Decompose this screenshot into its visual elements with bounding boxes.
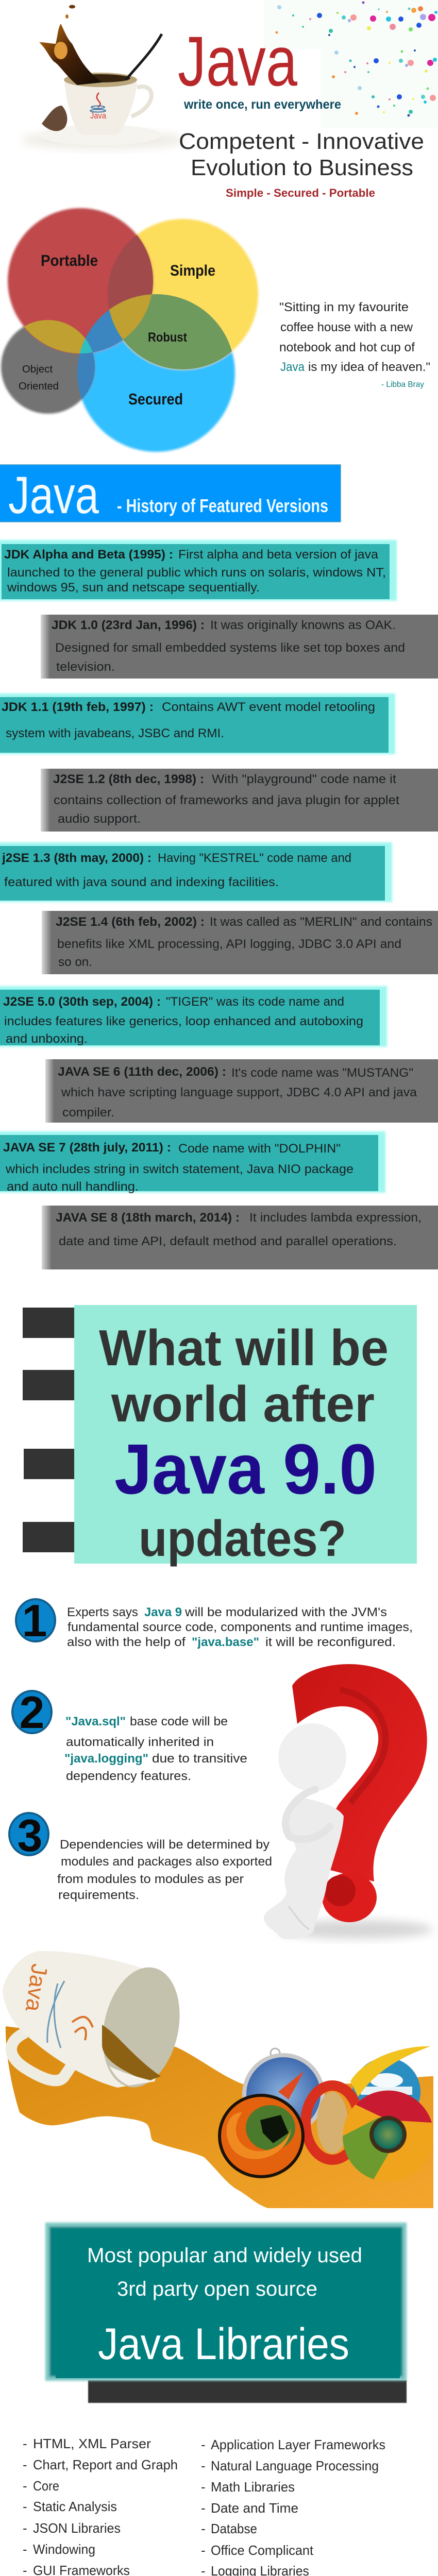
panel: J2SE 1.2: contains collection of frameworks and java plugin for applet bbox=[54, 793, 399, 807]
mug java logo: Java bbox=[21, 1962, 52, 2013]
panel: Java SE 8: date and time API, default method and parallel operations. bbox=[59, 1234, 397, 1248]
panel: JDK Alpha and Beta: First alpha and beta version of java bbox=[178, 548, 379, 562]
icon: number 1: 1 bbox=[22, 1595, 47, 1646]
list: libraries right column: - bbox=[201, 2479, 206, 2495]
subheading: Simple Secured Portable: Simple - Secured - Portable bbox=[226, 187, 375, 199]
icon: coffee cup with splash bbox=[21, 5, 186, 148]
step 1: Java 9 bbox=[144, 1605, 182, 1619]
venn labels: Simple bbox=[170, 262, 215, 279]
step 3: modules and packages also exported bbox=[61, 1855, 272, 1869]
venn labels: Secured bbox=[128, 390, 183, 408]
panel: Java Libraries banner: Java Libraries bbox=[98, 2319, 349, 2369]
list: libraries right column: Natural Language Processing bbox=[211, 2458, 379, 2473]
list: libraries right column: Date and Time bbox=[211, 2500, 298, 2516]
list: libraries left column: HTML, XML Parser bbox=[33, 2436, 151, 2451]
list: libraries right column: - bbox=[201, 2437, 206, 2452]
quote: notebook and hot cup of bbox=[279, 341, 415, 354]
panel: Java SE 8: JAVA SE 8 (18th march, 2014) : bbox=[56, 1211, 240, 1225]
venn labels: Robust bbox=[148, 330, 188, 345]
panel: Java SE 6: which have scripting language support, JDBC 4.0 API and java bbox=[61, 1086, 417, 1099]
panel: Java Libraries banner bbox=[47, 2225, 407, 2403]
list: libraries right column: Math Libraries bbox=[211, 2479, 295, 2495]
icon: safari bbox=[244, 2048, 323, 2133]
list: libraries left column: - bbox=[23, 2436, 27, 2451]
step 2: automatically inherited in bbox=[66, 1735, 214, 1749]
panel: JDK 1.1: system with javabeans, JSBC and RMI. bbox=[6, 726, 224, 740]
step 3 bbox=[9, 1810, 272, 1902]
tagline: write once, run everywhere bbox=[183, 97, 341, 112]
list: libraries right column: Application Layer Frameworks bbox=[211, 2437, 385, 2452]
list: libraries right column bbox=[201, 2437, 385, 2576]
icon: number 2 bbox=[12, 1687, 52, 1738]
step 2: "java.logging" bbox=[64, 1752, 148, 1766]
panel: what will be world after Java 9.0: What will be bbox=[99, 1319, 389, 1376]
panel: JDK 1.0: television. bbox=[56, 660, 115, 674]
icon: number 3: 3 bbox=[18, 1810, 42, 1861]
panel: J2SE 1.4: It was called as "MERLIN" and contains bbox=[210, 915, 432, 929]
panel: JDK 1.1: Contains AWT event model retooling bbox=[162, 700, 375, 714]
step 1: fundamental source code, components and runtime images, bbox=[68, 1620, 413, 1634]
step 1: "java.base" bbox=[192, 1635, 259, 1649]
list: libraries left column: Windowing bbox=[33, 2541, 95, 2557]
list: libraries right column: - bbox=[201, 2458, 206, 2473]
venn labels: Object bbox=[22, 364, 53, 375]
step 2: "Java.sql" bbox=[65, 1715, 126, 1728]
panel: JDK Alpha and Beta: windows 95, sun and netscape sequentially. bbox=[7, 581, 260, 595]
quote: "Sitting in my favourite bbox=[279, 300, 409, 314]
panel: Java SE 7 bbox=[0, 1131, 385, 1194]
coffee spill bbox=[6, 2026, 433, 2208]
panel: Java SE 6 bbox=[45, 1059, 438, 1123]
heading: Competent Innovative: Competent - Innovative bbox=[179, 129, 424, 154]
panel: JDK 1.0: Designed for small embedded systems like set top boxes and bbox=[55, 641, 405, 655]
heading: Competent Innovative: Evolution to Business bbox=[191, 155, 413, 180]
step 1: Experts says bbox=[67, 1605, 138, 1619]
panel: history header: - History of Featured Versions bbox=[117, 495, 328, 516]
panel: J2SE 1.2: audio support. bbox=[58, 812, 141, 826]
panel: Java SE 6: It's code name was "MUSTANG" bbox=[231, 1066, 413, 1080]
mug java logo bbox=[21, 1962, 93, 2048]
panel: Java SE 6: JAVA SE 6 (11th dec, 2006) : bbox=[58, 1065, 226, 1079]
panel: what will be world after Java 9.0 bbox=[23, 1305, 417, 1567]
quote: Java bbox=[280, 360, 305, 374]
list: libraries right column: Office Complicant bbox=[211, 2543, 314, 2558]
icon: opera bbox=[306, 2086, 359, 2160]
list: libraries left column: Static Analysis bbox=[33, 2499, 117, 2514]
panel: what will be world after Java 9.0: world after bbox=[111, 1376, 375, 1432]
panel: J2SE 1.3: Having "KESTREL" code name and bbox=[158, 851, 351, 865]
panel: J2SE 1.4: so on. bbox=[58, 955, 92, 969]
panel: J2SE 1.3: j2SE 1.3 (8th may, 2000) : bbox=[2, 851, 151, 865]
step 2 bbox=[12, 1687, 247, 1783]
panel: JDK Alpha and Beta bbox=[0, 540, 397, 601]
panel: J2SE 1.4: benefits like XML processing, API logging, JDBC 3.0 API and bbox=[57, 937, 401, 951]
panel: Java SE 7: Code name with "DOLPHIN" bbox=[178, 1142, 341, 1156]
panel: what will be world after Java 9.0: Java 9.0 bbox=[114, 1430, 377, 1509]
panel: Java SE 6: compiler. bbox=[62, 1106, 114, 1120]
mug bbox=[3, 1951, 190, 2094]
panel: J2SE 1.2: J2SE 1.2 (8th dec, 1998) : bbox=[53, 772, 204, 786]
step 3: from modules to modules as per bbox=[57, 1872, 244, 1886]
confetti background bbox=[264, 0, 438, 128]
panel: Java SE 7: and auto null handling. bbox=[7, 1180, 139, 1194]
heading: Competent Innovative bbox=[179, 129, 424, 180]
panel: J2SE 1.2 bbox=[41, 769, 438, 832]
icon: spilled Java mug and browsers bbox=[3, 1951, 433, 2208]
step 2: dependency features. bbox=[66, 1769, 191, 1783]
panel: J2SE 5.0: "TIGER" was its code name and bbox=[166, 995, 344, 1009]
list: libraries left column: - bbox=[23, 2520, 27, 2536]
panel: Java SE 8: It includes lambda expression, bbox=[249, 1211, 422, 1225]
icon: number 3 bbox=[9, 1810, 48, 1861]
panel: Java SE 7: JAVA SE 7 (28th july, 2011) : bbox=[3, 1141, 171, 1155]
panel: JDK 1.0 bbox=[41, 615, 438, 679]
list: libraries left column: Core bbox=[33, 2478, 59, 2494]
venn labels: Portable bbox=[41, 251, 98, 269]
list: libraries left column: JSON Libraries bbox=[33, 2520, 121, 2536]
panel: Java Libraries banner: 3rd party open source bbox=[117, 2278, 317, 2300]
list: libraries left column bbox=[23, 2436, 178, 2576]
panel: JDK 1.0: It was originally knowns as OAK. bbox=[210, 618, 396, 632]
step 1: it will be reconfigured. bbox=[265, 1635, 396, 1649]
icon: number 2: 2 bbox=[20, 1687, 44, 1738]
list: libraries left column: - bbox=[23, 2499, 27, 2514]
step 1: also with the help of bbox=[67, 1635, 186, 1649]
step 2: due to transitive bbox=[152, 1752, 247, 1766]
panel: Java Libraries banner: Most popular and widely used bbox=[87, 2244, 362, 2267]
quote: - Libba Bray bbox=[381, 380, 424, 389]
panel: Java SE 8 bbox=[42, 1206, 438, 1269]
panel: J2SE 5.0: J2SE 5.0 (30th sep, 2004) : bbox=[3, 995, 161, 1009]
quote: is my idea of heaven." bbox=[308, 360, 430, 374]
panel: J2SE 1.4 bbox=[42, 911, 438, 974]
icon: firefox bbox=[218, 2094, 305, 2178]
step 1: will be modularized with the JVM's bbox=[184, 1605, 387, 1619]
list: libraries right column: - bbox=[201, 2543, 206, 2558]
list: libraries left column: Chart, Report and Graph bbox=[33, 2457, 178, 2472]
venn diagram bbox=[1, 208, 258, 452]
icon: cup java logo: Java bbox=[90, 111, 106, 121]
step 3: requirements. bbox=[58, 1888, 139, 1902]
icon: internet explorer bbox=[350, 2046, 430, 2126]
panel: Java SE 7: which includes string in switch statement, Java NIO package bbox=[5, 1162, 353, 1176]
list: libraries left column: - bbox=[23, 2457, 27, 2472]
quote bbox=[279, 300, 430, 389]
icon: cup java logo bbox=[90, 93, 106, 121]
panel: JDK 1.1 bbox=[0, 693, 395, 754]
quote: coffee house with a new bbox=[280, 320, 413, 334]
list: libraries right column: - bbox=[201, 2521, 206, 2536]
title: Java: Java bbox=[178, 22, 298, 101]
list: libraries left column: - bbox=[23, 2478, 27, 2494]
panel: J2SE 5.0: and unboxing. bbox=[6, 1032, 88, 1046]
panel: J2SE 1.3 bbox=[0, 842, 392, 902]
panel: what will be world after Java 9.0: updates? bbox=[139, 1510, 346, 1567]
venn labels bbox=[19, 251, 215, 408]
list: libraries left column: - bbox=[23, 2541, 27, 2557]
list: libraries right column: - bbox=[201, 2500, 206, 2516]
panel: J2SE 1.4: J2SE 1.4 (6th feb, 2002) : bbox=[56, 915, 205, 929]
venn labels: Oriented bbox=[19, 381, 59, 392]
icon: chrome bbox=[343, 2091, 433, 2181]
list: libraries right column: Databse bbox=[211, 2521, 257, 2536]
panel: history header bbox=[0, 465, 341, 524]
icon: number 1 bbox=[16, 1595, 55, 1646]
step 3: Dependencies will be determined by bbox=[60, 1838, 269, 1852]
panel: JDK 1.1: JDK 1.1 (19th feb, 1997) : bbox=[2, 700, 154, 714]
icon: thinking man with question mark bbox=[264, 1664, 433, 1939]
panel: JDK Alpha and Beta: JDK Alpha and Beta (1995) : bbox=[4, 548, 173, 562]
panel: J2SE 5.0: includes features like generics, loop enhanced and autoboxing bbox=[4, 1014, 363, 1028]
panel: J2SE 1.3: featured with java sound and indexing facilities. bbox=[4, 875, 279, 889]
panel: JDK 1.0: JDK 1.0 (23rd Jan, 1996) : bbox=[52, 618, 205, 632]
panel: J2SE 5.0 bbox=[0, 986, 387, 1047]
panel: history header: Java bbox=[8, 466, 99, 524]
step 2: base code will be bbox=[130, 1715, 228, 1728]
panel: JDK Alpha and Beta: launched to the general public which runs on solaris, windows NT, bbox=[7, 566, 386, 580]
step 1 bbox=[16, 1595, 413, 1649]
panel: J2SE 1.2: With "playground" code name it bbox=[212, 772, 396, 786]
